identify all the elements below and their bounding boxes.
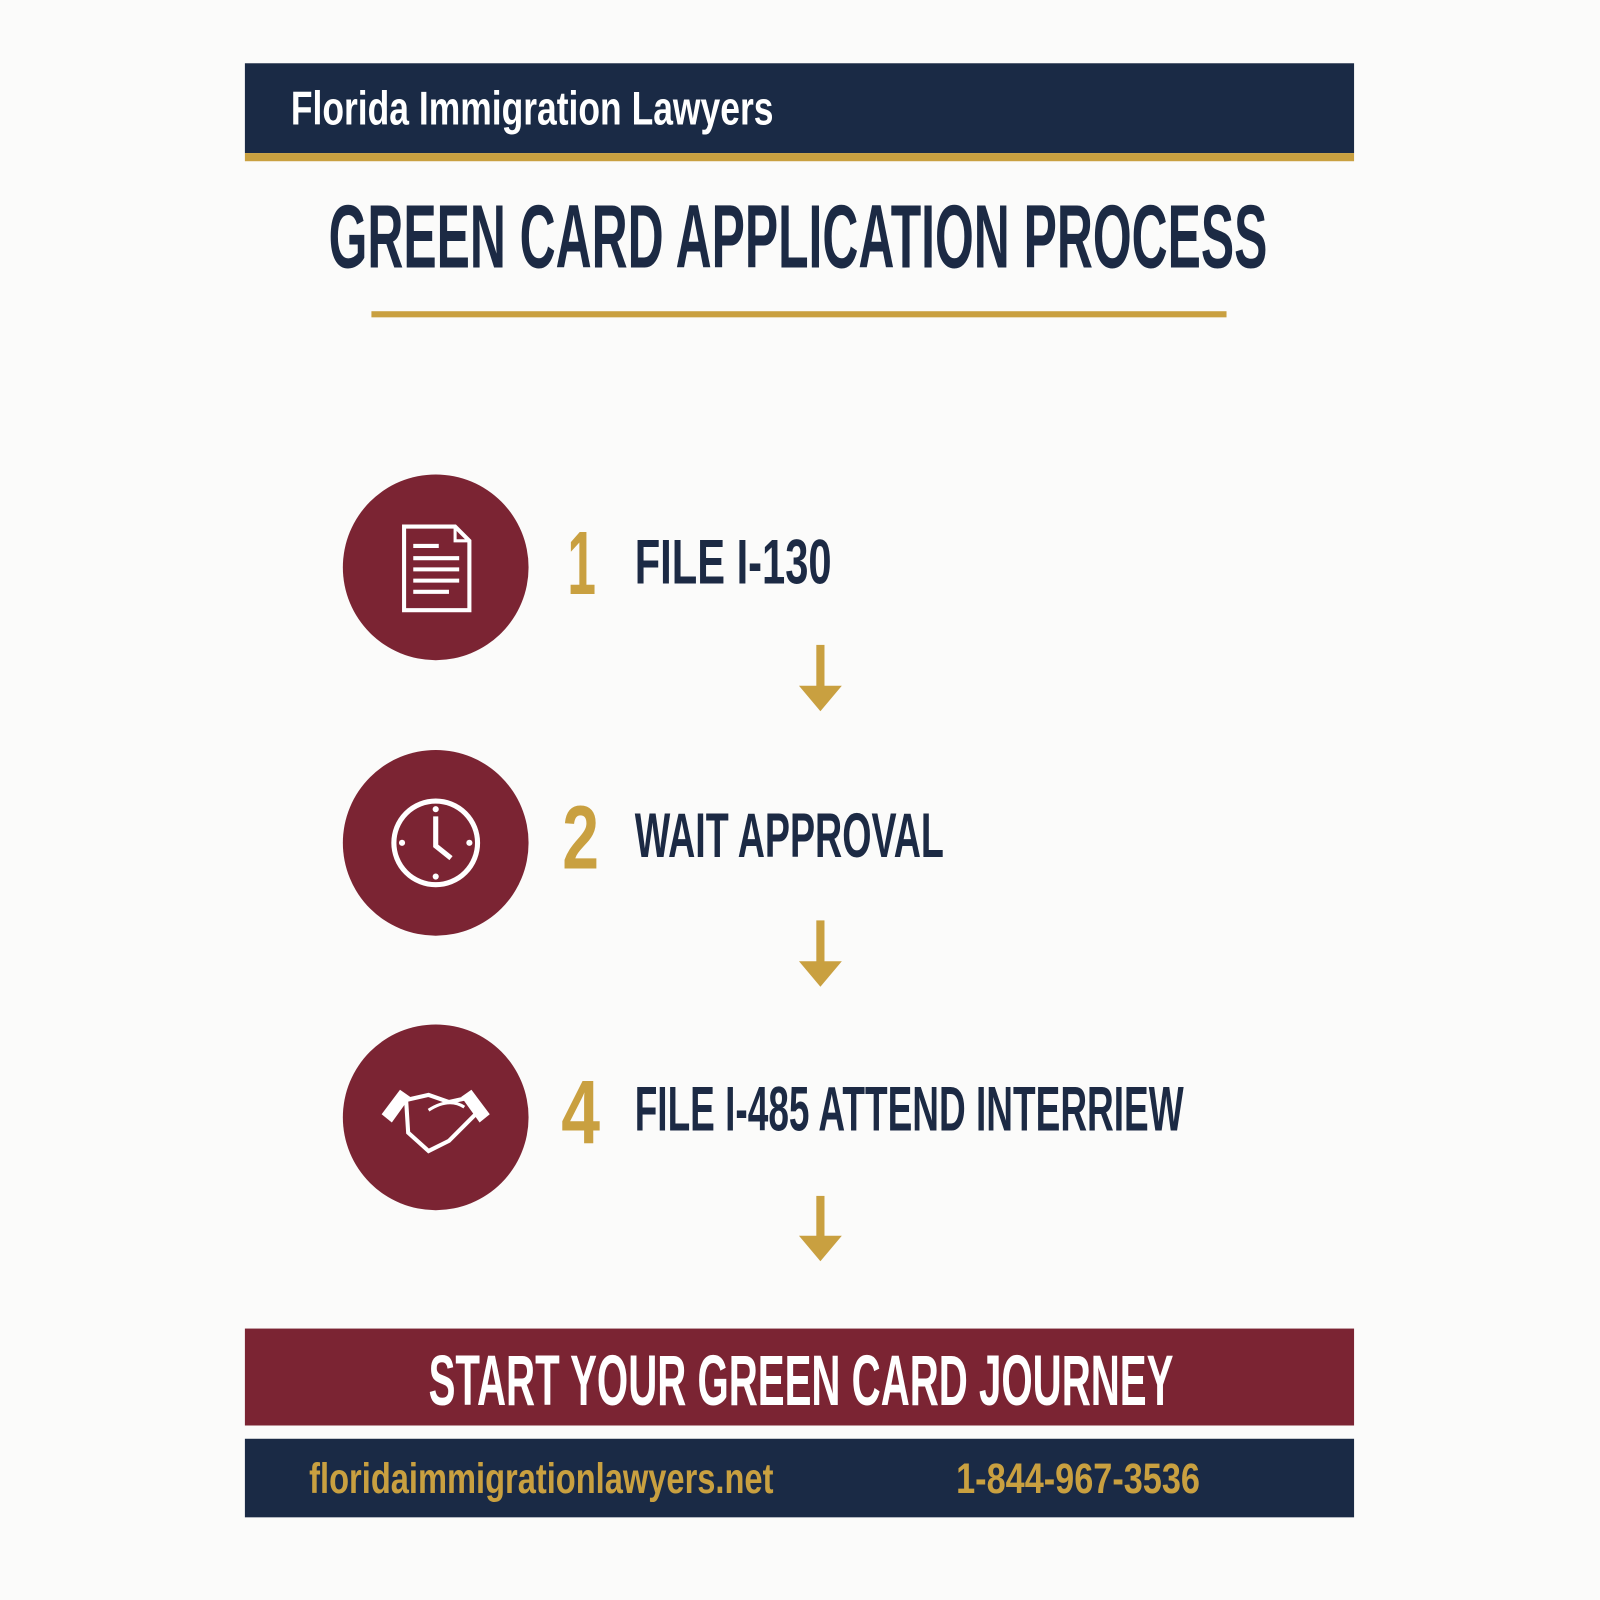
header text: Florida Immigration Lawyers: [291, 82, 773, 134]
phone: 1-844-967-3536: [956, 1455, 1200, 1503]
step 1: [343, 474, 832, 660]
number 1: 1: [567, 514, 596, 614]
icon: handshake: [343, 1024, 529, 1210]
CTA banner: [245, 1329, 1354, 1425]
icon: clock: [343, 750, 529, 936]
header bar: [245, 63, 1354, 161]
number 4: 4: [561, 1063, 600, 1163]
arrow 1: [799, 645, 842, 711]
arrow 2: [799, 920, 842, 987]
footer bar: [245, 1439, 1354, 1517]
icon: document: [343, 474, 529, 660]
number 2: 2: [562, 788, 599, 888]
website: floridaimmigrationlawyers.net: [309, 1455, 773, 1503]
label 3: FILE I-485 ATTEND INTERRIEW: [635, 1075, 1184, 1145]
title underline: [371, 311, 1227, 317]
label 1: FILE I-130: [635, 528, 832, 598]
step 2: [343, 750, 944, 936]
label 2: WAIT APPROVAL: [635, 801, 944, 871]
arrow 3: [799, 1196, 842, 1261]
step 3: [343, 1024, 1184, 1210]
